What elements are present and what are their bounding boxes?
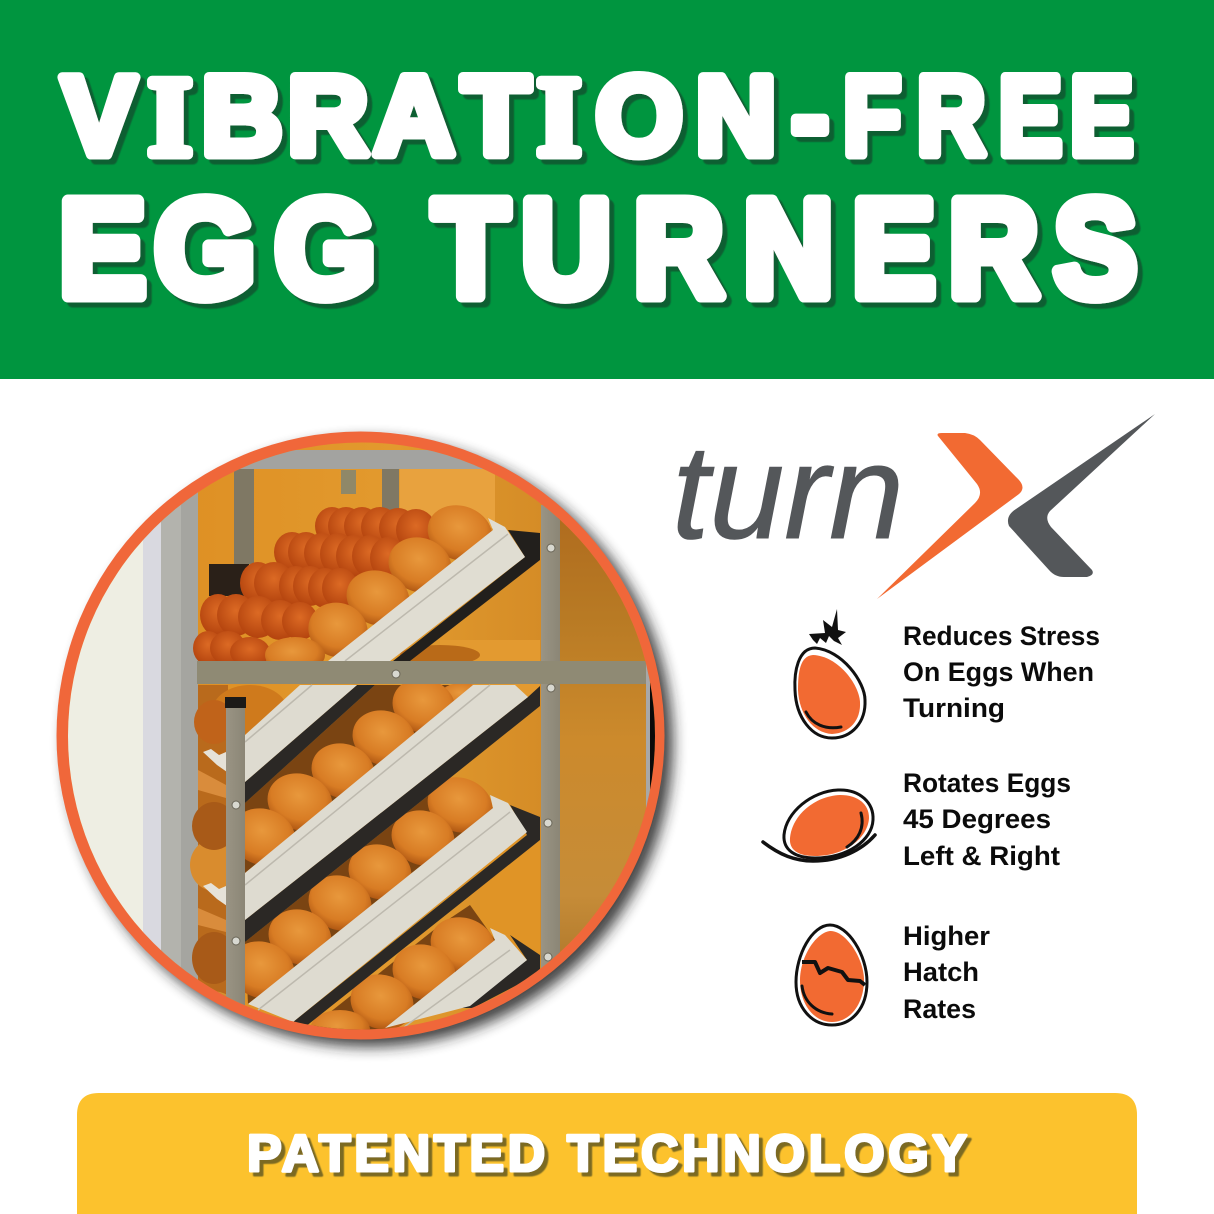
title line 2: TURNERS <box>433 171 1137 325</box>
circular photo of egg turner <box>56 430 673 1050</box>
title line 1: I <box>148 56 192 180</box>
photo content <box>60 430 670 1050</box>
logo orange chevron <box>877 433 1022 599</box>
title line 1 <box>62 54 1133 180</box>
text block: Reduces Stress <box>903 621 1100 651</box>
front eggs <box>245 505 494 1030</box>
title line 2 <box>59 171 1137 326</box>
footer heading: PATENTED TECHNOLOGY <box>247 1125 967 1183</box>
turnX logo <box>672 414 1155 599</box>
shadowed gaps behind lower trays <box>245 685 495 1032</box>
icon: tilted egg <box>763 790 875 861</box>
text block: Turning <box>903 693 1005 723</box>
text block: Rotates Eggs <box>903 768 1071 798</box>
benefit: higher hatch rates <box>796 921 990 1025</box>
benefit: rotates eggs <box>763 768 1071 871</box>
title line 1: BRAT <box>202 54 530 178</box>
top frame <box>240 450 483 469</box>
header banner <box>0 0 1214 379</box>
logo grey chevron <box>1008 414 1155 577</box>
title line 1: ON- <box>595 54 829 178</box>
text block: Left & Right <box>903 841 1060 871</box>
title line 1: FREE <box>843 54 1133 179</box>
steel frame <box>541 505 560 1005</box>
tray rails <box>245 518 540 1030</box>
text block <box>903 768 1071 871</box>
text block: Higher <box>903 921 990 951</box>
back eggs, upper stack <box>193 507 436 667</box>
text block <box>903 621 1100 723</box>
text block: Rates <box>903 994 976 1024</box>
benefit: reduces stress <box>795 609 1100 738</box>
title line 1: V <box>62 54 136 178</box>
text block: On Eggs When <box>903 657 1094 687</box>
text block <box>903 921 990 1024</box>
left wall <box>68 540 143 932</box>
text block: 45 Degrees <box>903 804 1051 834</box>
back eggs, lower left <box>190 685 284 998</box>
logo wordmark: turn <box>672 418 904 567</box>
icon: cracked egg <box>796 925 867 1025</box>
title line 2: EGG <box>59 172 376 326</box>
text block: Hatch <box>903 957 979 987</box>
icon: egg with starburst <box>795 609 865 738</box>
title line 1: I <box>537 56 581 180</box>
footer banner <box>77 1093 1137 1214</box>
